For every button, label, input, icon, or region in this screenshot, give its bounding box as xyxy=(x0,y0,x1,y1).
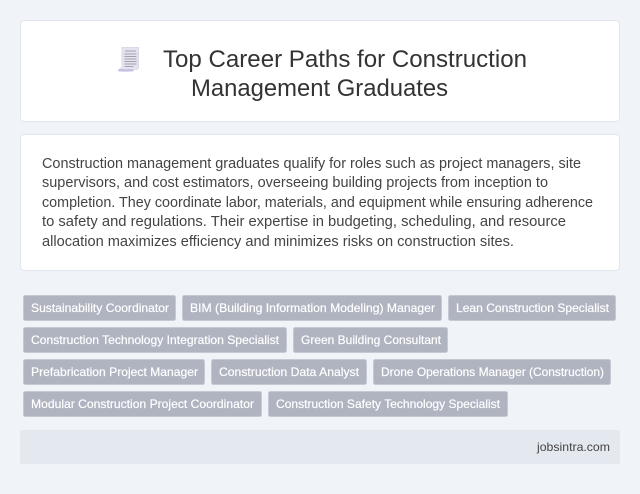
title: Top Career Paths for Construction xyxy=(163,46,527,73)
tag: Lean Construction Specialist xyxy=(448,296,616,320)
tag: Drone Operations Manager xyxy=(374,360,610,384)
tag list xyxy=(24,296,616,416)
title xyxy=(163,46,527,102)
text block: description: Construction management graduates qualify for roles such as project managers, site xyxy=(42,156,581,172)
tag: Construction Safety Technology Specialist: Construction Safety Technology Specialist xyxy=(276,397,501,411)
text block: description: to safety and regulations. Their expertise in budgeting, scheduling, and resource xyxy=(42,214,566,230)
tag: Construction Data Analyst xyxy=(212,360,366,384)
text block: description xyxy=(42,156,593,250)
text block: description: completion. They coordinate labor, materials, and equipment while ensuring adherence xyxy=(42,195,593,211)
panel: description xyxy=(20,134,620,270)
tag: Green Building Consultant xyxy=(294,328,448,352)
tag: Construction Technology Integration Specialist xyxy=(24,328,286,352)
text block: description: allocation maximizes efficiency and minimizes risks on construction sites. xyxy=(42,234,514,250)
tag: Construction Data Analyst: Construction Data Analyst xyxy=(219,365,360,379)
tag: Prefabrication Project Manager xyxy=(24,360,204,384)
tag: Modular Construction Project Coordinator xyxy=(24,392,262,416)
tag: Sustainability Coordinator xyxy=(24,296,176,320)
tag: Sustainability Coordinator: Sustainability Coordinator xyxy=(31,301,169,315)
footer: jobsintra.com xyxy=(536,440,610,454)
tag: Green Building Consultant: Green Building Consultant xyxy=(301,333,442,347)
icon: document scroll xyxy=(118,48,138,71)
tag: BIM Manager: BIM (Building Information Modeling) Manager xyxy=(190,301,435,315)
tag: Modular Construction Project Coordinator: Modular Construction Project Coordinator xyxy=(31,397,254,411)
footer xyxy=(20,430,620,464)
title: Management Graduates xyxy=(191,75,448,102)
tag: Construction Safety Technology Specialist xyxy=(268,392,508,416)
tag: Construction Technology Integration Specialist: Construction Technology Integration Specialist xyxy=(31,333,280,347)
tag: Lean Construction Specialist: Lean Construction Specialist xyxy=(456,301,610,315)
panel: header xyxy=(20,20,620,122)
tag: BIM Manager xyxy=(182,296,442,320)
tag: Prefabrication Project Manager: Prefabrication Project Manager xyxy=(31,365,198,379)
text block: description: supervisors, and cost estimators, overseeing building projects from inception to xyxy=(42,175,548,191)
tag: Drone Operations Manager: Drone Operations Manager (Construction) xyxy=(381,365,604,379)
